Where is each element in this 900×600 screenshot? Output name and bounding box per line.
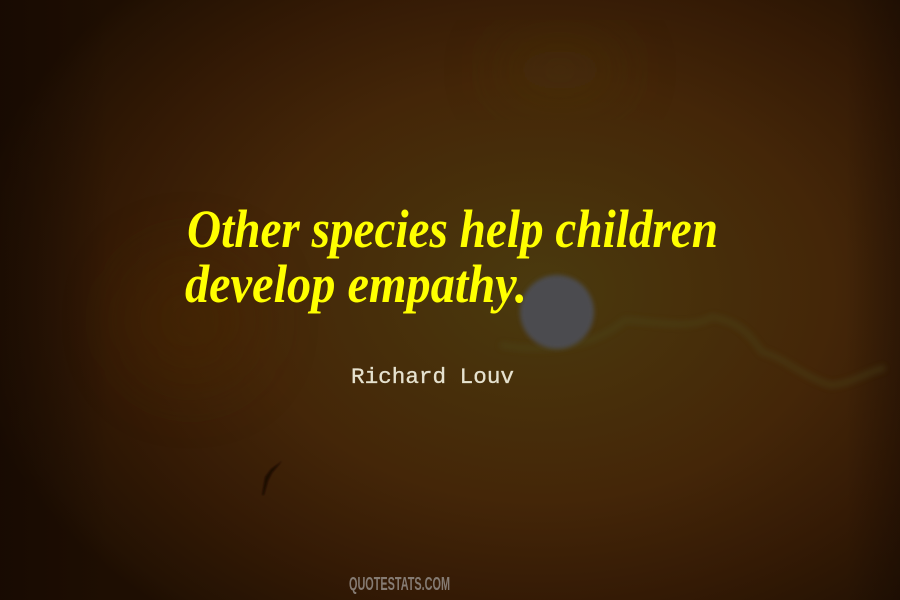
sun disc xyxy=(520,275,594,349)
author name: Richard Louv xyxy=(351,365,514,390)
quote text: develop empathy. xyxy=(185,254,527,314)
quote text xyxy=(185,199,718,314)
quote text: Other species help children xyxy=(187,199,718,259)
bird silhouette xyxy=(262,461,282,495)
watermark: QUOTESTATS.COM xyxy=(349,574,450,594)
cloud streak xyxy=(500,317,885,385)
